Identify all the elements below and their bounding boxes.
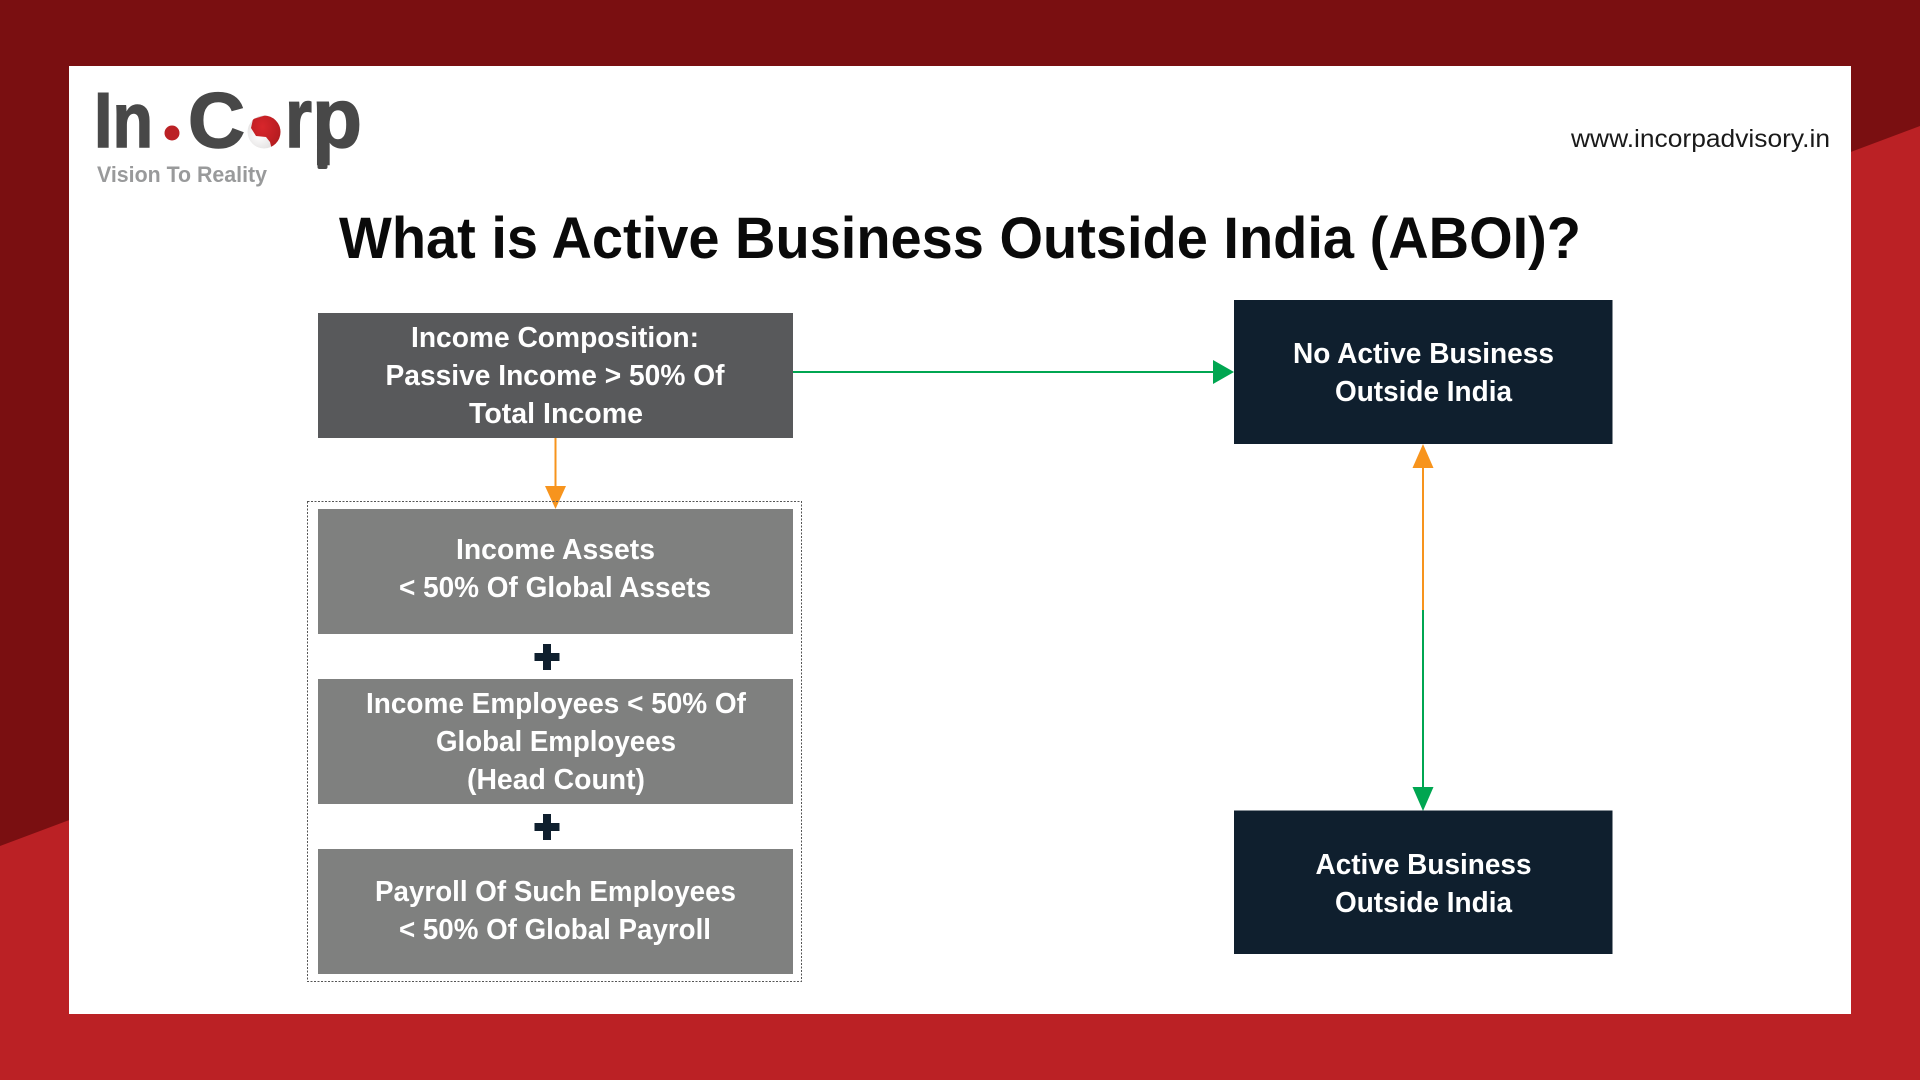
website url: www.incorpadvisory.in bbox=[1570, 125, 1830, 153]
box: no active business bbox=[1234, 300, 1612, 444]
box: active business bbox=[1234, 810, 1612, 954]
box: income assets: Income Assets bbox=[456, 534, 655, 566]
box: income composition: Passive Income > 50% Of bbox=[386, 360, 725, 392]
box: income employees: (Head Count) bbox=[467, 764, 645, 796]
box: income composition bbox=[318, 313, 793, 438]
dotted criteria group bbox=[308, 502, 802, 982]
box: no active business: No Active Business bbox=[1293, 338, 1554, 370]
logo wordmark bbox=[94, 71, 362, 169]
logo wordmark: r bbox=[285, 71, 312, 165]
box: income composition: Income Composition: bbox=[411, 322, 699, 354]
title: What is Active Business Outside India (ABOI)? bbox=[339, 206, 1581, 271]
icon: plus bbox=[534, 644, 560, 670]
box: income assets: < 50% Of Global Assets bbox=[399, 572, 711, 604]
box: income employees: Global Employees bbox=[436, 726, 676, 758]
box: no active business: Outside India bbox=[1335, 376, 1513, 408]
box: income employees bbox=[318, 679, 793, 804]
box: income assets bbox=[318, 509, 793, 634]
arrow: income composition to no active business bbox=[793, 360, 1234, 384]
arrow: income composition to criteria group bbox=[545, 438, 566, 509]
double arrow between outcomes bbox=[1412, 444, 1434, 811]
logo bbox=[97, 92, 360, 186]
box: active business: Outside India bbox=[1335, 887, 1513, 919]
logo wordmark: p bbox=[312, 71, 362, 165]
icon: globe bbox=[248, 116, 280, 148]
icon: plus bbox=[534, 814, 560, 840]
box: active business: Active Business bbox=[1316, 849, 1532, 881]
box: payroll bbox=[318, 849, 793, 974]
box: income composition: Total Income bbox=[469, 398, 643, 430]
logo red dot bbox=[164, 126, 180, 140]
box: income employees: Income Employees < 50% Of bbox=[366, 688, 746, 720]
logo wordmark: C bbox=[188, 76, 245, 164]
box: payroll: Payroll Of Such Employees bbox=[375, 876, 736, 908]
logo wordmark: In bbox=[94, 76, 153, 164]
logo tagline: Vision To Reality bbox=[97, 162, 268, 187]
box: payroll: < 50% Of Global Payroll bbox=[399, 914, 711, 946]
